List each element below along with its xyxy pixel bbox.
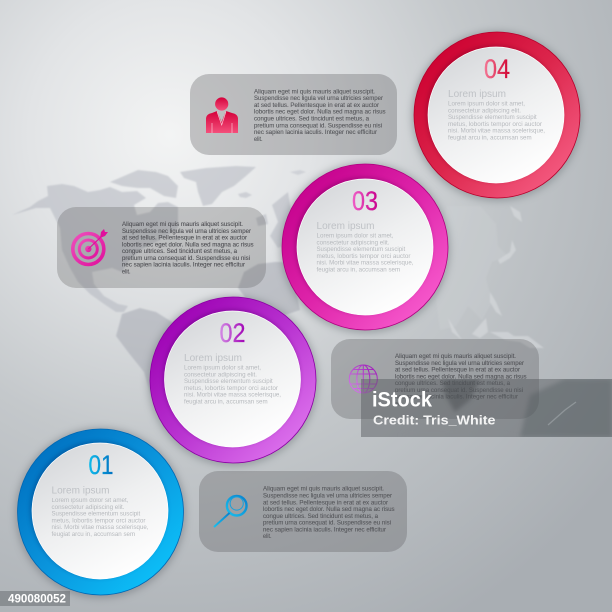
body text: metus, lobortis tempor orci auctor	[448, 122, 542, 128]
text block: nec sapien lacinia iaculis. Integer nec efficitur	[263, 527, 386, 533]
text block: Aliquam eget mi quis mauris aliquet suscipit.	[122, 222, 243, 228]
text block: elit.	[263, 534, 272, 540]
image id tag: 490080052	[8, 594, 66, 606]
body text: consectetur adipiscing elit.	[316, 240, 390, 246]
map: arctic islands	[110, 170, 178, 198]
text block: lobortis nec eget dolor. Nulla sed magna ac risus	[395, 374, 527, 380]
map: japan and islands	[490, 206, 522, 316]
text block: Suspendisse nec ligula vel urna ultricies semper	[395, 361, 524, 367]
text block: Aliquam eget mi quis mauris aliquet suscipit.	[254, 89, 375, 95]
text block	[254, 89, 386, 143]
text block	[122, 222, 254, 275]
icon: globe	[349, 365, 377, 393]
map: north america	[12, 184, 178, 312]
text block: Aliquam eget mi quis mauris aliquet suscipit.	[395, 354, 516, 360]
body text: consectetur adipiscing elit.	[184, 372, 257, 378]
body text: feugiat arcu in, accumsan sem	[316, 268, 400, 274]
heading: Lorem ipsum	[316, 220, 375, 232]
text block: at sed tellus. Pellentesque in erat at ex auctor	[263, 500, 388, 506]
body text: Lorem ipsum dolor sit amet,	[184, 366, 261, 372]
icon: magnifier	[214, 496, 246, 527]
text block: pretium urna consequat id. Suspendisse eu nisi	[254, 123, 382, 129]
panel: text box with person icon	[190, 74, 397, 155]
world map	[12, 166, 544, 400]
text block: congue ultrices. Sed tincidunt est metus, a	[122, 249, 238, 255]
body text: metus, lobortis tempor orci auctor	[52, 518, 146, 524]
text block: nec sapien lacinia iaculis. Integer nec efficitur	[254, 130, 377, 136]
body text	[448, 102, 545, 142]
text block: at sed tellus. Pellentesque in erat at ex auctor	[254, 103, 379, 109]
body text: consectetur adipiscing elit.	[52, 505, 125, 511]
ring	[414, 32, 580, 198]
text block: nec sapien lacinia iaculis. Integer nec efficitur	[122, 263, 245, 269]
text block: congue ultrices. Sed tincidunt est metus, a	[254, 116, 370, 122]
panel: text box with magnifier icon	[199, 471, 407, 552]
number: 02	[220, 318, 246, 348]
step 02 circle	[148, 296, 318, 466]
body text: metus, lobortis tempor orci auctor	[184, 386, 278, 392]
heading: Lorem ipsum	[184, 352, 242, 364]
text block: pretium urna consequat id. Suspendisse eu nisi	[122, 256, 250, 262]
body text: metus, lobortis tempor orci auctor	[316, 254, 410, 260]
map: svalbard	[290, 170, 306, 175]
map: greenland	[180, 166, 256, 206]
text block: Suspendisse nec ligula vel urna ultricies semper	[254, 96, 383, 102]
text block	[395, 354, 527, 407]
text block: nec sapien lacinia iaculis. Integer nec efficitur	[395, 395, 518, 401]
map: indonesia and papua	[448, 318, 544, 348]
body text: Suspendisse elementum suscipit	[184, 379, 273, 385]
body text	[316, 234, 414, 274]
body text: nisi. Morbi vitae massa scelerisque,	[184, 393, 281, 399]
number: 04	[484, 54, 510, 84]
watermark credit: Credit: Tris_White	[373, 412, 496, 427]
map: south america	[116, 308, 190, 400]
body text: feugiat arcu in, accumsan sem	[52, 532, 135, 538]
text block: lobortis nec eget dolor. Nulla sed magna ac risus	[263, 507, 395, 513]
ring	[282, 164, 448, 330]
body text: nisi. Morbi vitae massa scelerisque,	[52, 525, 149, 531]
text block: at sed tellus. Pellentesque in erat at ex auctor	[122, 236, 247, 242]
map: asia (lighter)	[436, 206, 508, 330]
text block: congue ultrices. Sed tincidunt est metus, a	[395, 381, 511, 387]
body text	[52, 498, 149, 538]
panel: text box with globe icon	[331, 339, 539, 419]
disc	[32, 443, 168, 579]
body text: Suspendisse elementum suscipit	[52, 512, 141, 518]
text block: at sed tellus. Pellentesque in erat at ex auctor	[395, 368, 520, 374]
text block	[263, 487, 395, 540]
body text: nisi. Morbi vitae massa scelerisque,	[316, 261, 414, 267]
text block: pretium urna consequat id. Suspendisse eu nisi	[263, 521, 391, 527]
text block: congue ultrices. Sed tincidunt est metus, a	[263, 514, 379, 520]
watermark band	[361, 379, 612, 437]
body text: nisi. Morbi vitae massa scelerisque,	[448, 129, 545, 135]
image id tag	[0, 591, 70, 606]
body text: feugiat arcu in, accumsan sem	[448, 136, 532, 142]
body text: Suspendisse elementum suscipit	[316, 247, 406, 253]
disc	[428, 47, 564, 183]
panel: text box with target icon	[57, 207, 266, 288]
watermark logo: iStock	[372, 388, 432, 412]
heading: Lorem ipsum	[448, 88, 506, 100]
step 03 circle	[280, 163, 450, 333]
ring	[150, 297, 316, 463]
text block: Aliquam eget mi quis mauris aliquet suscipit.	[263, 487, 384, 493]
icon: person	[206, 97, 238, 133]
body text: Suspendisse elementum suscipit	[448, 115, 537, 121]
body text: Lorem ipsum dolor sit amet,	[316, 234, 394, 240]
text block: pretium urna consequat id. Suspendisse eu nisi	[395, 388, 523, 394]
number: 03	[352, 186, 378, 216]
body text: Lorem ipsum dolor sit amet,	[52, 498, 129, 504]
heading: Lorem ipsum	[52, 484, 110, 496]
disc	[164, 311, 300, 447]
text block: lobortis nec eget dolor. Nulla sed magna ac risus	[122, 242, 254, 248]
text block: elit.	[395, 401, 404, 407]
map: africa	[238, 262, 300, 320]
body text: feugiat arcu in, accumsan sem	[184, 400, 268, 406]
text block: elit.	[122, 269, 131, 275]
text block: Suspendisse nec ligula vel urna ultricies semper	[263, 494, 392, 500]
map: europe	[256, 192, 296, 248]
text block: elit.	[254, 137, 263, 143]
icon: target	[73, 229, 108, 264]
disc	[297, 179, 433, 315]
number: 01	[88, 450, 114, 480]
ring	[18, 429, 184, 595]
text block: lobortis nec eget dolor. Nulla sed magna ac risus	[254, 110, 386, 116]
body text: consectetur adipiscing elit.	[448, 108, 521, 114]
map: iceland	[238, 192, 252, 198]
body text	[184, 366, 281, 406]
step 04 circle	[412, 31, 582, 201]
text block: Suspendisse nec ligula vel urna ultricies semper	[122, 229, 251, 235]
step 01 circle	[16, 428, 186, 598]
body text: Lorem ipsum dolor sit amet,	[448, 102, 525, 108]
